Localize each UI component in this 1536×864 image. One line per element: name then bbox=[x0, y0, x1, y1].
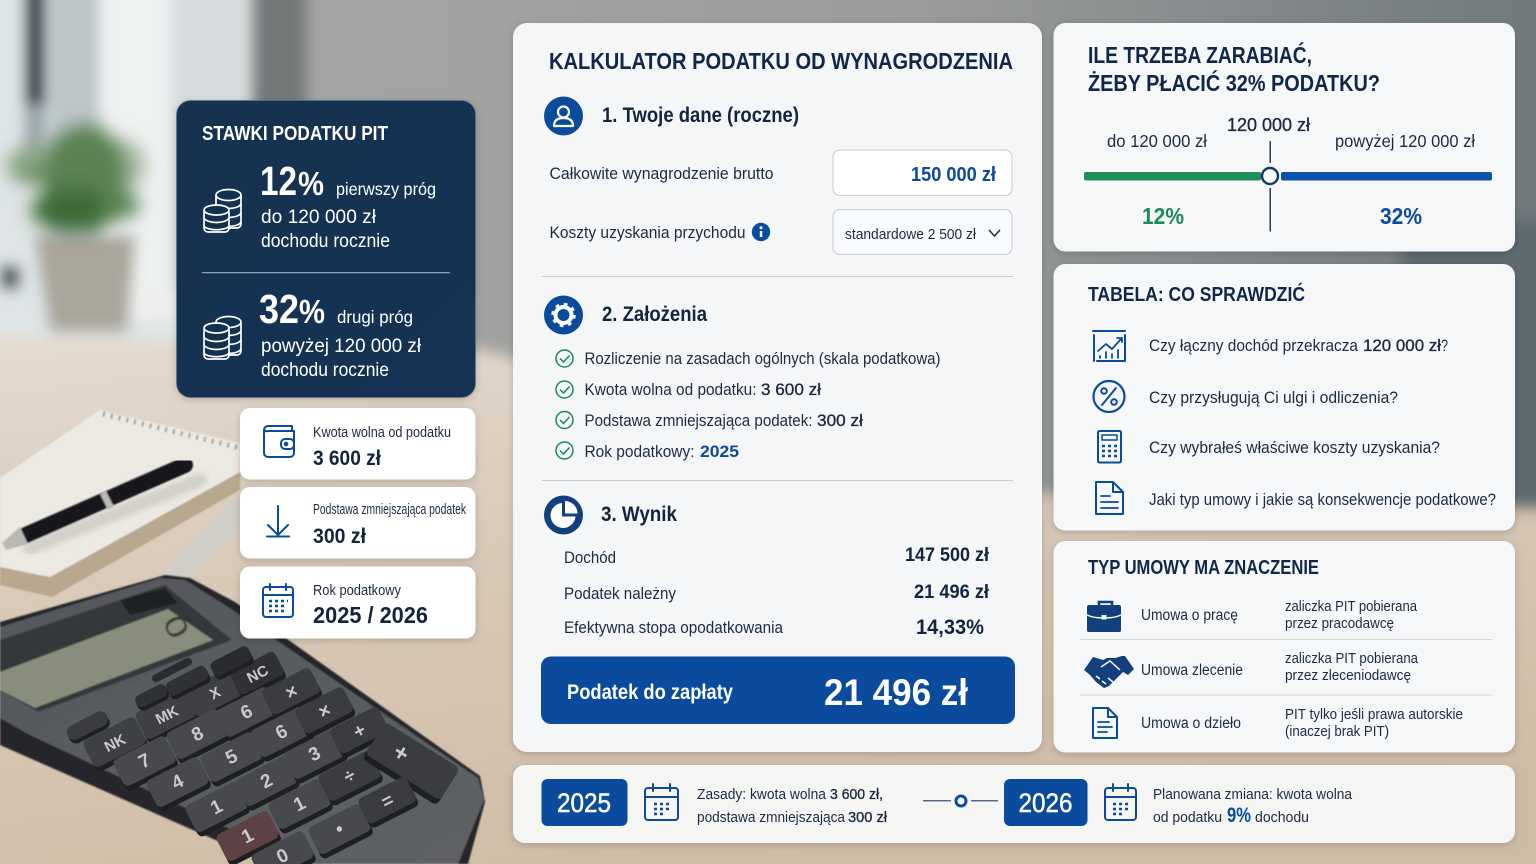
row: umowa o prace: zaliczka PIT pobierana bbox=[1285, 599, 1418, 615]
section 2: zalozenia: 2. Założenia bbox=[602, 303, 707, 326]
title: kalkulator: KALKULATOR PODATKU OD WYNAGRODZENIA bbox=[549, 48, 1013, 74]
calculator keys: 6 bbox=[237, 701, 256, 724]
row: umowa o dzielo: Umowa o dzieło bbox=[1141, 715, 1241, 732]
calculator keys: 5 bbox=[222, 746, 242, 769]
row: umowa: Jaki typ umowy i jakie są konsekwencje podatkowe? bbox=[1149, 490, 1496, 509]
heading: ile trzeba zarabiac: ŻEBY PŁACIĆ 32% PODATKU? bbox=[1088, 69, 1380, 96]
panel: typ umowy bbox=[1054, 541, 1515, 752]
threshold scale: 32% bbox=[1380, 203, 1422, 229]
rate: 32% second bracket: dochodu rocznie bbox=[261, 359, 389, 381]
card: kwota wolna: Kwota wolna od podatku bbox=[313, 425, 451, 441]
calculator keys: 2 bbox=[257, 770, 276, 793]
row: ulgi bbox=[1094, 381, 1398, 412]
heading: ile trzeba zarabiac: ILE TRZEBA ZARABIAĆ, bbox=[1088, 41, 1312, 68]
text: zasady 2025 bbox=[697, 786, 888, 826]
calculator keys: 7 bbox=[135, 750, 154, 773]
row: umowa zlecenie bbox=[1084, 651, 1419, 688]
rate: 32% second bracket: drugi próg bbox=[337, 307, 413, 327]
heading: tabela: TABELA: CO SPRAWDZIĆ bbox=[1088, 282, 1305, 306]
result bar: podatek do zaplaty: Podatek do zapłaty bbox=[567, 681, 733, 704]
checklist item 2: 3 600 zł bbox=[761, 380, 821, 399]
checklist item 4: Rok podatkowy: bbox=[584, 443, 694, 461]
card: rok podatkowy bbox=[240, 566, 476, 638]
icon: info bbox=[752, 223, 770, 241]
icon: gear bbox=[544, 296, 583, 334]
row: ulgi: Czy przysługują Ci ulgi i odliczenia? bbox=[1149, 388, 1398, 407]
calculator keys: • bbox=[332, 819, 348, 840]
icon: briefcase bbox=[1087, 602, 1121, 632]
badge: 2026: 2026 bbox=[1018, 788, 1072, 818]
checklist item 3: 300 zł bbox=[817, 411, 863, 430]
pen bbox=[2, 465, 200, 550]
icon: calendar 2026 bbox=[1105, 784, 1136, 820]
blurred plant bbox=[6, 125, 146, 232]
select: koszty bbox=[833, 210, 1012, 254]
section 3: wynik: 21 496 zł bbox=[914, 582, 990, 603]
section 3: wynik: 14,33% bbox=[916, 616, 984, 639]
calculator keys: = bbox=[378, 790, 397, 813]
panel: prog 120 000 bbox=[1054, 23, 1515, 252]
row: dochod bbox=[1093, 331, 1448, 361]
calculator keys: 1 bbox=[290, 793, 310, 816]
text: zmiana 2026: Planowana zmiana: kwota wolna bbox=[1153, 786, 1353, 803]
row: koszty bbox=[1098, 431, 1440, 462]
threshold scale: 120 000 zł bbox=[1227, 115, 1310, 135]
rate: 12% first bracket bbox=[260, 158, 436, 252]
section 3: wynik: Podatek należny bbox=[564, 584, 676, 603]
calculator keys: ÷ bbox=[340, 765, 359, 788]
input: brutto bbox=[833, 150, 1012, 196]
section 1: twoje dane: Koszty uzyskania przychodu bbox=[550, 223, 746, 242]
text: zmiana 2026 bbox=[1153, 786, 1353, 827]
icon: calendar bbox=[263, 584, 293, 617]
rate: 32% second bracket: % bbox=[299, 293, 325, 330]
panel: tabela co sprawdzic bbox=[1054, 264, 1515, 530]
row: umowa o dzielo bbox=[1093, 707, 1463, 740]
row: dochod: Czy łączny dochód przekracza bbox=[1149, 336, 1358, 355]
calculator keys: × bbox=[282, 681, 301, 704]
text: zmiana 2026: 9% bbox=[1227, 804, 1251, 827]
icon: wallet bbox=[264, 426, 294, 457]
rate: 32% second bracket: powyżej 120 000 zł bbox=[261, 335, 422, 357]
notebook bbox=[0, 410, 240, 597]
row: umowa o dzielo: (inaczej brak PIT) bbox=[1285, 724, 1389, 740]
row: umowa o dzielo: PIT tylko jeśli prawa autorskie bbox=[1285, 707, 1463, 723]
connector bbox=[923, 796, 998, 806]
icon: user bbox=[544, 96, 583, 136]
row: koszty: Czy wybrałeś właściwe koszty uzyskania? bbox=[1149, 438, 1440, 457]
panel: stawki podatku PIT bbox=[176, 100, 476, 398]
icon: growth chart bbox=[1093, 331, 1125, 361]
section 1: twoje dane: 1. Twoje dane (roczne) bbox=[602, 104, 799, 127]
checklist item 4 bbox=[556, 442, 739, 461]
row: umowa bbox=[1096, 482, 1496, 514]
text: zasady 2025: podstawa zmniejszająca bbox=[697, 809, 846, 826]
section 3: wynik: 3. Wynik bbox=[601, 503, 677, 526]
row: umowa zlecenie: zaliczka PIT pobierana bbox=[1285, 651, 1419, 667]
calculator photo: 0 bbox=[156, 610, 195, 644]
calculator keys: 6 bbox=[272, 721, 291, 744]
row: umowa o prace: przez pracodawcę bbox=[1285, 616, 1394, 632]
icon: coins 1 bbox=[204, 190, 241, 232]
rate: 12% first bracket: pierwszy próg bbox=[336, 179, 436, 199]
icon: pie chart bbox=[544, 496, 583, 534]
rate: 12% first bracket: do 120 000 zł bbox=[261, 206, 377, 228]
calculator keys: + bbox=[350, 720, 369, 743]
card: podstawa: Podstawa zmniejszająca podatek bbox=[313, 502, 467, 518]
heading: ile trzeba zarabiac bbox=[1088, 41, 1380, 96]
row: umowa o prace: Umowa o pracę bbox=[1141, 607, 1238, 624]
badge: 2025 bbox=[542, 779, 628, 826]
icon: coins 2 bbox=[204, 316, 241, 359]
checklist item 2 bbox=[556, 380, 821, 399]
calculator keys: NC bbox=[244, 662, 271, 687]
icon: document bbox=[1093, 708, 1117, 738]
calculator keys: MK bbox=[153, 703, 182, 728]
text: zmiana 2026: od podatku bbox=[1153, 809, 1222, 826]
calculator keys: × bbox=[315, 700, 334, 723]
section 1: twoje dane bbox=[544, 96, 1012, 254]
section 2: zalozenia bbox=[544, 296, 940, 461]
threshold scale bbox=[1084, 115, 1492, 232]
text: zmiana 2026: dochodu bbox=[1255, 809, 1309, 826]
rate: 12% first bracket: 12 bbox=[260, 158, 297, 204]
badge: 2025: 2025 bbox=[557, 788, 611, 818]
checklist item 1: Rozliczenie na zasadach ogólnych (skala podatkowa) bbox=[584, 350, 940, 368]
calculator keys: + bbox=[388, 738, 414, 768]
section 3: wynik: Dochód bbox=[564, 548, 616, 567]
calculator keys: 4 bbox=[168, 771, 188, 794]
rate: 32% second bracket: 32 bbox=[259, 286, 299, 332]
calculator keys: 3 bbox=[305, 743, 324, 766]
checklist item 2: Kwota wolna od podatku: bbox=[584, 381, 756, 399]
icon: calculator bbox=[1098, 431, 1121, 462]
section 3: wynik: Efektywna stopa opodatkowania bbox=[564, 618, 783, 637]
section 1: twoje dane: Całkowite wynagrodzenie brutto bbox=[550, 164, 774, 183]
calculator keys: X bbox=[207, 684, 224, 703]
heading: stawki: STAWKI PODATKU PIT bbox=[202, 123, 388, 145]
result bar: podatek do zaplaty bbox=[541, 656, 1015, 724]
rate: 12% first bracket: dochodu rocznie bbox=[261, 230, 390, 252]
card: kwota wolna: 3 600 zł bbox=[313, 447, 381, 470]
panel: os czasu 2025-2026 bbox=[513, 765, 1515, 843]
heading: typ umowy: TYP UMOWY MA ZNACZENIE bbox=[1088, 557, 1319, 579]
icon: download arrow bbox=[267, 506, 289, 536]
threshold scale: powyżej 120 000 zł bbox=[1335, 131, 1475, 151]
rate: 32% second bracket bbox=[259, 286, 422, 381]
card: podstawa: 300 zł bbox=[313, 525, 366, 548]
icon: calendar 2025 bbox=[645, 784, 678, 820]
icon: handshake bbox=[1084, 656, 1134, 688]
calculator keys: NK bbox=[102, 731, 129, 756]
text: zasady 2025: Zasady: kwota wolna bbox=[697, 786, 827, 803]
row: dochod: 120 000 zł bbox=[1363, 336, 1441, 355]
checklist item 3: Podstawa zmniejszająca podatek: bbox=[584, 412, 812, 430]
row: umowa o prace bbox=[1087, 599, 1418, 632]
threshold scale: 12% bbox=[1142, 203, 1184, 229]
text: zasady 2025: 3 600 zł, bbox=[830, 786, 883, 803]
result bar: podatek do zaplaty: 21 496 zł bbox=[824, 672, 968, 713]
card: podstawa bbox=[240, 487, 476, 558]
row: umowa zlecenie: Umowa zlecenie bbox=[1141, 662, 1243, 679]
calculator keys bbox=[64, 645, 460, 864]
row: umowa zlecenie: przez zleceniodawcę bbox=[1285, 668, 1411, 684]
calculator keys: 1 bbox=[238, 825, 258, 848]
select: koszty: standardowe 2 500 zł bbox=[845, 226, 977, 243]
badge: 2026 bbox=[1004, 779, 1088, 826]
section 3: wynik: 147 500 zł bbox=[905, 545, 990, 566]
icon: document bbox=[1096, 482, 1123, 514]
calculator keys: 8 bbox=[188, 723, 207, 746]
card: kwota wolna bbox=[240, 408, 476, 480]
rate: 12% first bracket: % bbox=[298, 165, 324, 202]
row: dochod: ? bbox=[1441, 336, 1448, 355]
panel: kalkulator bbox=[513, 23, 1042, 752]
threshold scale: do 120 000 zł bbox=[1107, 131, 1207, 151]
section 3: wynik bbox=[544, 496, 990, 639]
calculator keys: 1 bbox=[207, 796, 227, 819]
card: rok podatkowy: 2025 / 2026 bbox=[313, 602, 428, 628]
text: zasady 2025: 300 zł bbox=[848, 809, 888, 826]
icon: percent bbox=[1094, 381, 1124, 412]
checklist item 4: 2025 bbox=[700, 442, 739, 461]
input: brutto: 150 000 zł bbox=[911, 164, 996, 186]
calculator photo bbox=[0, 575, 485, 864]
card: rok podatkowy: Rok podatkowy bbox=[313, 583, 402, 599]
